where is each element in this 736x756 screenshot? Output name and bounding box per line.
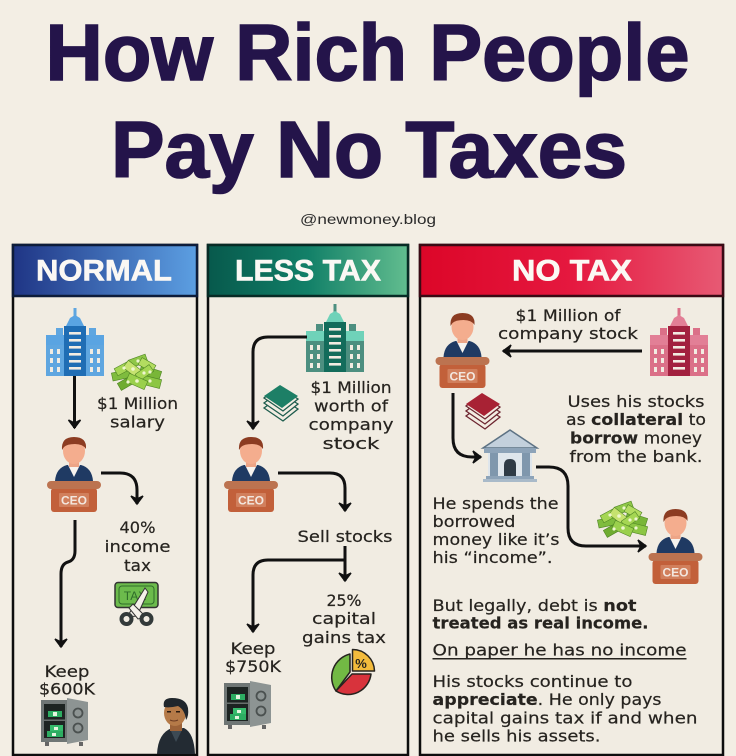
salary label	[97, 394, 178, 432]
icon: money pile	[597, 501, 648, 537]
icon: stock stack	[466, 393, 500, 429]
keep label: Keep	[230, 639, 276, 658]
panel: no tax	[420, 245, 723, 755]
panel: normal	[13, 245, 197, 755]
arrow: CEO to bank	[453, 393, 481, 457]
icon: scissors cutting tax bill: TAX	[124, 589, 146, 603]
icon: CEO	[47, 437, 101, 512]
icon: bank	[483, 430, 537, 482]
arrow: CEO to tax	[101, 473, 137, 504]
icon: stock stack	[264, 385, 298, 421]
title	[46, 8, 690, 194]
capital gains label: 25%	[326, 591, 362, 610]
stock label: $1 Million of	[516, 306, 621, 325]
capital gains label	[302, 591, 386, 647]
tax label	[104, 518, 170, 575]
arrow: CEO to sell	[278, 473, 345, 511]
keep label: $600K	[39, 680, 96, 698]
icon: CEO	[224, 437, 278, 512]
appreciation text	[432, 672, 698, 746]
title: How Rich People	[46, 8, 690, 97]
header: less tax	[208, 245, 408, 296]
header: less tax: LESS TAX	[235, 254, 381, 288]
stock label	[308, 378, 394, 453]
spending text	[432, 494, 560, 567]
appreciation text: His stocks continue to	[432, 672, 632, 691]
capital gains label: capital	[312, 609, 376, 628]
stock label: worth of	[314, 396, 388, 416]
handle: @newmoney.blog	[300, 211, 436, 227]
icon: safe	[224, 681, 271, 729]
title: Pay No Taxes	[111, 105, 627, 194]
tax label: income	[104, 537, 170, 556]
tax label: tax	[124, 556, 151, 575]
icon: pie chart: %	[355, 656, 367, 671]
arrow: bank to CEO	[536, 467, 646, 546]
spending text: borrowed	[432, 512, 516, 531]
keep label: Keep	[44, 662, 90, 681]
icon: scissors cutting tax bill	[115, 582, 158, 624]
salary label: salary	[110, 412, 165, 432]
debt text	[432, 596, 648, 632]
icon: blue building	[46, 308, 104, 376]
collateral text	[566, 392, 706, 466]
arrow: CEO to keep	[61, 520, 75, 647]
icon: CEO	[436, 313, 490, 388]
icon: CEO	[648, 509, 702, 584]
stock label: stock	[322, 434, 380, 453]
spending text: his “income”.	[432, 548, 552, 567]
icon: green building	[306, 304, 364, 372]
arrow: sell to keep	[253, 560, 345, 632]
collateral text: from the bank.	[570, 447, 702, 466]
underlined statement: On paper he has no income	[432, 640, 686, 660]
icon: money pile	[111, 354, 162, 390]
collateral text: as collateral to	[566, 410, 706, 429]
spending text: money like it’s	[432, 530, 560, 549]
header: no tax: NO TAX	[512, 254, 632, 288]
header: normal: NORMAL	[36, 254, 172, 288]
icon: avatar	[157, 698, 195, 754]
appreciation text: appreciate . He only pays	[432, 690, 662, 709]
panel: less tax	[208, 245, 408, 755]
collateral text: borrow money	[570, 428, 702, 448]
collateral text: Uses his stocks	[568, 392, 704, 411]
debt text: treated as real income.	[432, 614, 648, 632]
salary label: $1 Million	[97, 394, 178, 413]
header: normal	[13, 245, 197, 296]
stock label	[498, 306, 639, 343]
arrow: building to CEO	[503, 350, 642, 352]
stock label: company	[308, 415, 394, 434]
keep label	[39, 662, 96, 698]
keep label: $750K	[225, 657, 282, 676]
keep label	[225, 639, 282, 676]
icon: red building	[650, 308, 708, 376]
arrow: building to CEO	[253, 337, 307, 429]
arrow: building to CEO	[73, 376, 76, 428]
capital gains label: gains tax	[302, 628, 386, 647]
tax label: 40%	[120, 518, 156, 537]
appreciation text: capital gains tax if and when	[432, 708, 698, 728]
arrow: sell to tax	[344, 546, 346, 581]
icon: safe	[41, 698, 88, 746]
sell stocks label: Sell stocks	[298, 527, 392, 546]
header: no tax	[420, 245, 723, 296]
debt text: But legally, debt is not	[432, 596, 637, 615]
spending text: He spends the	[432, 494, 558, 513]
appreciation text: he sells his assets.	[432, 726, 600, 746]
stock label: $1 Million	[310, 378, 392, 397]
icon: pie chart	[332, 649, 374, 694]
stock label: company stock	[498, 324, 639, 343]
